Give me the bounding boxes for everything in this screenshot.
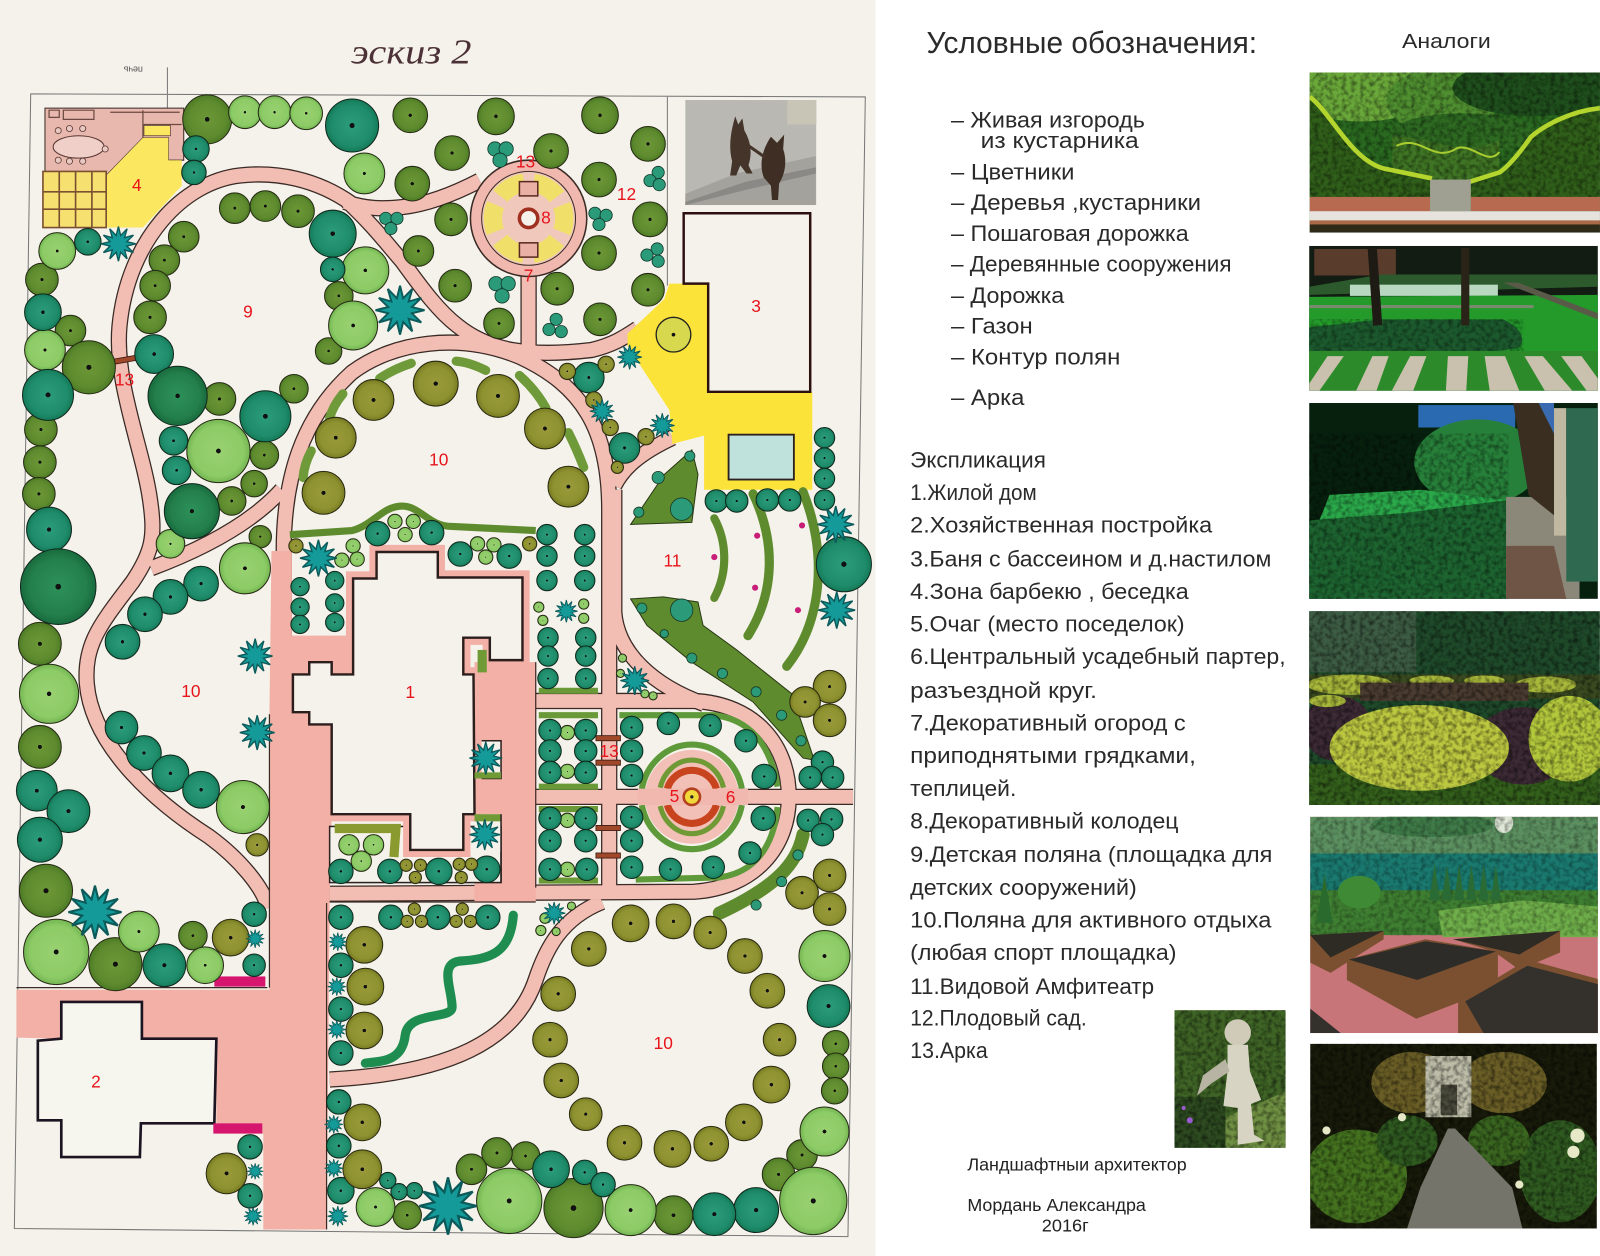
legend list: – Газон — [951, 314, 1033, 339]
explication list — [910, 447, 1286, 1063]
building 2: utility building — [38, 1002, 216, 1157]
trees: teal green — [16, 99, 871, 1236]
heading: analogues: Аналоги — [1402, 31, 1491, 53]
photo: garden statue — [1174, 1010, 1286, 1148]
explication list: теплицей. — [910, 776, 1016, 801]
legend list: – Контур полян — [951, 344, 1120, 369]
plan zone numbers: 6 — [726, 787, 735, 807]
panel: legend heading: Условные обозначения: — [927, 26, 1257, 60]
explication list: 9.Детская поляна (площадка для — [910, 842, 1272, 867]
photo 1: wavy hedges — [1310, 72, 1600, 233]
magenta gates — [213, 976, 265, 1134]
trees: light green — [19, 96, 850, 1236]
explication list: (любая спорт площадка) — [910, 940, 1176, 965]
arches 13 — [114, 355, 620, 858]
plot under the house — [330, 741, 501, 883]
plan zone numbers — [91, 151, 761, 1092]
plan zone numbers: 1 — [405, 682, 415, 702]
legend list — [951, 108, 1232, 410]
photo 3: hedge beside terrace — [1309, 403, 1598, 599]
explication list: 3.Баня с бассеином и д.настилом — [910, 546, 1271, 571]
plan zone numbers: 4 — [132, 175, 142, 195]
plan zone numbers: 3 — [751, 296, 761, 316]
hedges — [290, 361, 584, 1063]
plan zone numbers: 11 — [663, 550, 681, 570]
explication list: 6.Центральный усадебный партер, — [910, 644, 1286, 669]
legend list: – Цветники — [951, 160, 1074, 185]
explication list: приподнятыми грядками, — [910, 743, 1196, 768]
credits — [967, 1154, 1187, 1236]
credits: Ландшафтныи архитектор — [967, 1154, 1187, 1174]
plan zone numbers: 10 — [429, 449, 448, 469]
explication list: разъездной круг. — [910, 678, 1097, 703]
trees: deep green — [20, 366, 219, 624]
explication list: 7.Декоративный огород с — [910, 711, 1186, 736]
shrub clusters: three small teal circles — [380, 142, 665, 338]
explication list: 4.Зона барбекю , беседка — [910, 579, 1189, 604]
plan zone numbers: 13 — [516, 151, 535, 171]
explication list: 10.Поляна для активного отдыха — [910, 907, 1272, 932]
legend list: – Арка — [951, 385, 1025, 410]
trees: olive green — [18, 95, 849, 1238]
plan zone numbers: 12 — [617, 184, 636, 204]
plan zone numbers: 9 — [243, 301, 253, 321]
credits: Мордань Александра — [967, 1195, 1146, 1215]
explication list: 12.Плодовый сад. — [910, 1005, 1087, 1030]
legend list: – Деревянные сооружения — [951, 251, 1232, 276]
plan zone numbers: 2 — [91, 1072, 101, 1092]
legend list: – Живая изгородь — [951, 108, 1145, 133]
explication list: 2.Хозяйственная постройка — [910, 513, 1213, 538]
plan zone numbers: 10 — [181, 681, 201, 701]
road network — [86, 174, 853, 1079]
legend list: – Пошаговая дорожка — [951, 221, 1189, 246]
zone 3: bathhouse, pool and deck — [628, 213, 812, 490]
photo 2: lawn with stepping stones — [1309, 246, 1598, 391]
photo 6: arched garden path — [1310, 1044, 1597, 1228]
explication list: 5.Очаг (место поседелок) — [910, 612, 1185, 637]
spruces — [68, 227, 855, 1235]
plan zone numbers: 13 — [600, 741, 619, 761]
panel: hand-drawn garden plan — [0, 0, 876, 1256]
plan zone numbers: 5 — [670, 786, 679, 806]
zone 8: decorative well and vegetable beds — [470, 160, 587, 277]
amphitheatre planting — [631, 450, 818, 913]
explication list: 1.Жилой дом — [910, 480, 1037, 505]
photo: rabbit sculpture — [685, 100, 816, 206]
plan zone numbers: 8 — [541, 207, 551, 227]
plan zone numbers: 7 — [524, 266, 533, 286]
explication list: 8.Декоративный колодец — [910, 808, 1179, 833]
plan zone numbers: 13 — [115, 370, 134, 390]
photo 4: golden shrubs and bench — [1309, 611, 1600, 805]
trees: olive yellow — [206, 356, 846, 1194]
legend list: – Деревья ,кустарники — [951, 190, 1201, 215]
plan zone numbers: 10 — [654, 1033, 673, 1053]
photo 5: raised vegetable beds — [1310, 816, 1598, 1034]
explication list: детских сооружений) — [910, 875, 1137, 900]
legend list: из кустарника — [981, 128, 1139, 153]
heading: sketch title: эскиз 2 — [351, 32, 471, 71]
zone 4: barbecue and gazebo — [43, 108, 184, 228]
explication list: 13.Арка — [910, 1038, 988, 1063]
credits: 2016г — [1042, 1216, 1089, 1236]
central parterre — [539, 691, 778, 881]
building 1: main house — [293, 552, 522, 883]
legend list: – Дорожка — [951, 283, 1065, 308]
explication list: Экспликация — [910, 447, 1046, 472]
explication list: 11.Видовой Амфитеатр — [910, 974, 1154, 999]
mirrored note: stove: печь — [123, 64, 143, 74]
main pink drive and forecourt — [16, 551, 536, 1229]
